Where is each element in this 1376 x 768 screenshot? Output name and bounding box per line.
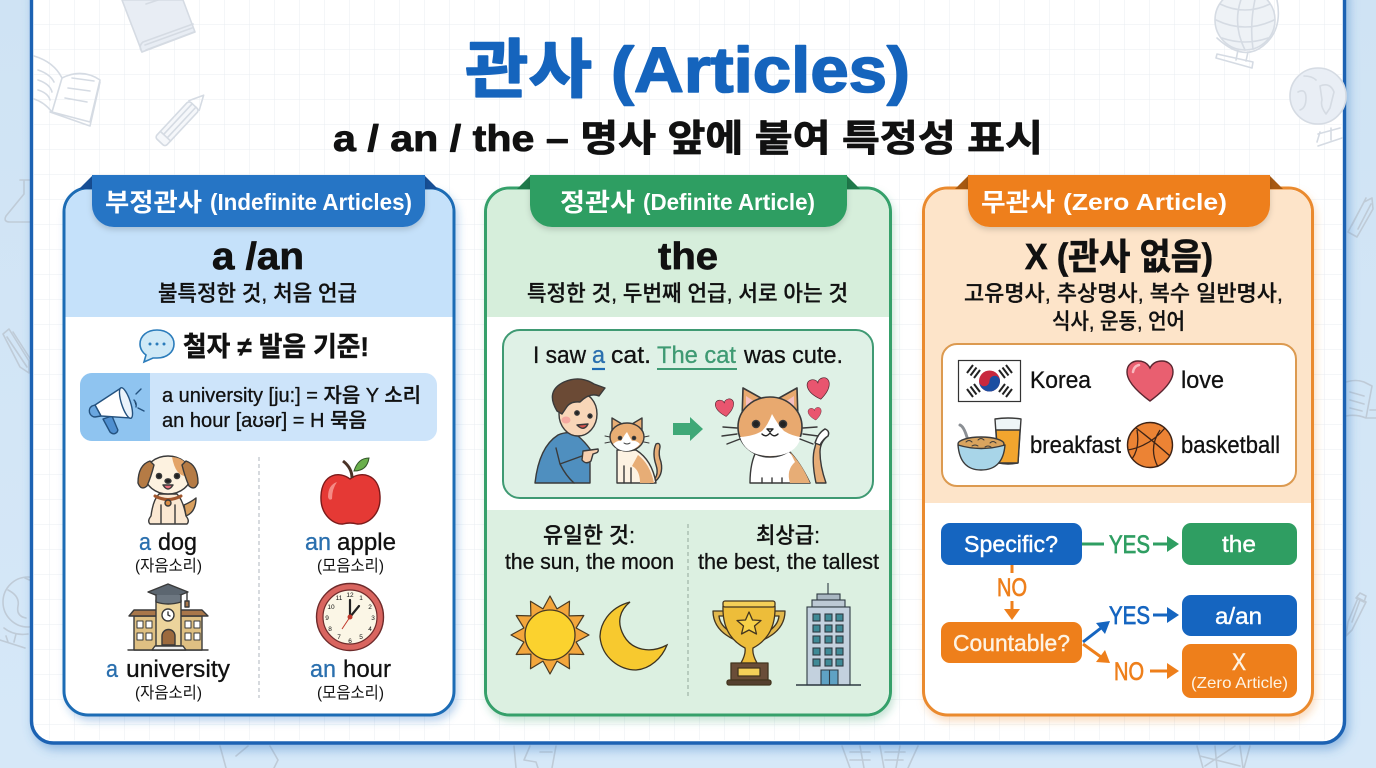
tab: indefinite xyxy=(92,175,425,227)
icon: clock: 7 xyxy=(337,634,341,641)
label: an hour: hour xyxy=(343,656,391,683)
text: superlatives xyxy=(698,523,879,574)
icon: trophy xyxy=(713,601,785,685)
label: a university xyxy=(106,656,230,702)
icon: hearts xyxy=(715,377,832,421)
label: a university: university xyxy=(126,656,230,683)
arrow: yes to the: YES xyxy=(1109,531,1150,559)
icon: clock: 10 xyxy=(327,604,335,611)
icon: clock: 1 xyxy=(359,595,363,602)
panel: indefinite articles xyxy=(64,175,454,715)
icon: clock: 12 xyxy=(346,592,354,599)
tab fold xyxy=(79,176,438,189)
arrow: yes to a/an: YES xyxy=(1109,602,1150,630)
divider xyxy=(258,457,260,698)
label: an apple: apple xyxy=(337,529,396,556)
icon: basketball xyxy=(1128,422,1172,468)
text: unique things: the sun, the moon xyxy=(505,549,674,574)
node: a/an xyxy=(1182,595,1297,636)
icon: heart xyxy=(1127,361,1173,401)
tab: zero xyxy=(968,175,1270,227)
tab: definite xyxy=(530,175,847,227)
text: unique things xyxy=(505,523,674,574)
icon: apple xyxy=(321,458,380,524)
arrow: no to countable: NO xyxy=(997,574,1027,602)
tab: zero: (Zero Article) xyxy=(1063,189,1227,215)
icon: clock: 2 xyxy=(368,604,372,611)
label: an hour: an xyxy=(310,656,336,683)
arrow xyxy=(673,417,703,441)
icon: university xyxy=(128,584,208,650)
label: love: love xyxy=(1181,367,1224,394)
label: Korea: Korea xyxy=(1030,367,1092,394)
icon: dog xyxy=(138,456,198,524)
tab fold xyxy=(955,176,1283,189)
callout: pronunciation xyxy=(80,373,437,441)
icon: tall building xyxy=(796,583,861,685)
heading: the: the xyxy=(658,236,718,278)
node: the xyxy=(1182,523,1297,565)
tab: indefinite: 부정관사 xyxy=(105,189,202,217)
example sentence xyxy=(533,342,843,369)
icon: megaphone xyxy=(89,386,144,434)
icon: korean flag xyxy=(958,360,1020,402)
arrow: yes to a/an xyxy=(1083,602,1179,642)
arrow: yes to the xyxy=(1082,531,1179,559)
tab fold xyxy=(517,176,860,189)
icon: clock: 3 xyxy=(371,615,375,622)
tab: definite: (Definite Article) xyxy=(643,189,815,215)
icon: clock: 4 xyxy=(368,626,372,633)
title: 관사 (Articles) xyxy=(465,34,910,106)
label: a dog: dog xyxy=(158,529,197,556)
tab: definite: 정관사 xyxy=(560,189,635,217)
node: countable xyxy=(941,622,1082,663)
node: a/an: a/an xyxy=(1215,603,1262,629)
label: breakfast: breakfast xyxy=(1030,432,1121,459)
callout: pronunciation: an hour [aʊər] = H 묵음 xyxy=(162,410,367,432)
arrow: no to zero article: NO xyxy=(1114,658,1144,686)
icon: moon xyxy=(600,602,667,670)
text: superlatives: 최상급: xyxy=(756,523,820,548)
description xyxy=(964,281,1283,334)
tab: indefinite: (Indefinite Articles) xyxy=(210,189,412,215)
label: an apple: (모음소리) xyxy=(317,557,384,575)
label: an apple xyxy=(305,529,396,575)
divider xyxy=(687,524,689,697)
example sentence: The cat xyxy=(657,342,736,369)
label: a dog: (자음소리) xyxy=(135,557,202,575)
icon: speech bubble xyxy=(140,330,174,362)
label: a dog xyxy=(135,529,202,575)
heading: X: X (관사 없음) xyxy=(1025,236,1213,277)
example box xyxy=(942,344,1296,486)
label: an hour xyxy=(310,656,391,702)
node: specific: Specific? xyxy=(964,531,1058,557)
arrow: no to zero article xyxy=(1083,644,1179,686)
node: specific xyxy=(941,523,1082,565)
label: basketball: basketball xyxy=(1181,432,1280,459)
description: 특정한 것, 두번째 언급, 서로 아는 것 xyxy=(527,281,848,306)
panel: definite article xyxy=(486,175,890,715)
node: zero article: (Zero Article) xyxy=(1191,675,1288,692)
example sentence: a xyxy=(592,342,606,369)
description: 불특정한 것, 처음 언급 xyxy=(158,281,357,306)
rule heading: 철자 ≠ 발음 기준! xyxy=(183,332,369,362)
illustration: big cat xyxy=(722,388,829,483)
node: zero article: X xyxy=(1232,649,1246,676)
text: superlatives: the best, the tallest xyxy=(698,549,879,574)
description: 식사, 운동, 언어 xyxy=(1052,309,1185,334)
label: a university: (자음소리) xyxy=(135,684,202,702)
illustration: small cat xyxy=(605,418,662,483)
callout: pronunciation: a university [ju:] = 자음 Y 소리 xyxy=(162,384,421,407)
example box xyxy=(503,330,873,498)
label: a dog: a xyxy=(139,529,152,556)
description: 고유명사, 추상명사, 복수 일반명사, xyxy=(964,281,1283,306)
heading: a / an: a /an xyxy=(212,236,304,278)
icon: clock: 9 xyxy=(325,615,329,622)
icon: wire globe xyxy=(1215,0,1278,68)
label: an hour: (모음소리) xyxy=(317,684,384,702)
node: countable: Countable? xyxy=(953,630,1070,656)
icon: clock xyxy=(316,584,384,650)
example sentence: cat. xyxy=(611,342,651,369)
example sentence: was cute. xyxy=(743,342,843,369)
icon: continents globe xyxy=(1290,68,1346,146)
tab: zero: 무관사 xyxy=(981,189,1055,217)
arrow: no to countable xyxy=(997,565,1027,620)
icon: clock: 6 xyxy=(348,638,352,645)
decorations inside frame xyxy=(34,0,1346,147)
icon: clock: 11 xyxy=(336,595,343,602)
icon: clock: 8 xyxy=(328,626,332,633)
icon: closed book xyxy=(122,0,195,52)
flowchart xyxy=(941,523,1297,698)
node: the: the xyxy=(1222,531,1256,557)
icon: clock: 5 xyxy=(359,634,363,641)
icon: cereal and juice xyxy=(958,418,1021,470)
label: a university: a xyxy=(106,656,119,683)
node: zero article xyxy=(1182,644,1297,698)
decorations outside frame xyxy=(0,180,1376,768)
example sentence: I saw xyxy=(533,342,587,369)
label: an apple: an xyxy=(305,529,331,556)
text: unique things: 유일한 것: xyxy=(543,523,635,548)
illustration: boy xyxy=(535,379,605,483)
icon: pencil xyxy=(155,90,209,147)
icon: sun xyxy=(511,596,589,674)
icon: open book xyxy=(34,56,100,126)
subtitle: a / an / the – 명사 앞에 붙여 특정성 표시 xyxy=(333,118,1043,159)
panel: zero article xyxy=(924,175,1312,715)
